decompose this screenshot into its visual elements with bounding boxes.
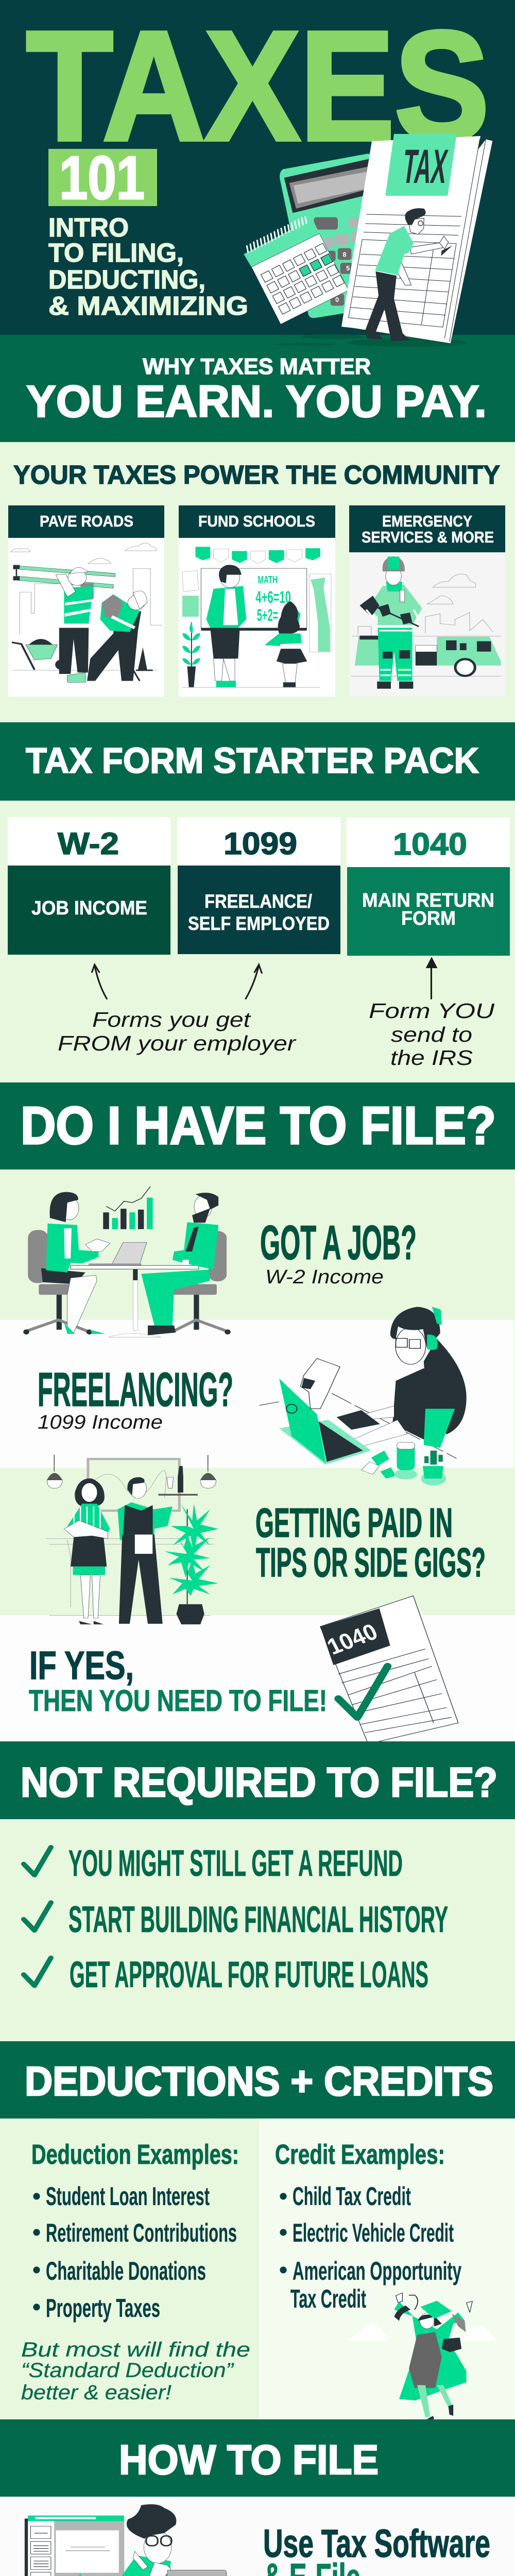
card: W-2: JOB INCOME: [31, 897, 147, 919]
note: form you send: Form YOU: [369, 999, 494, 1023]
icon: 1040 form with check: 1040: [323, 1619, 382, 1660]
icon: calculator: [280, 154, 372, 318]
banner: tax form starter pack: [0, 722, 515, 801]
text: getting paid in tips: [255, 1500, 486, 1585]
icon: 1040 form with check: [320, 1596, 458, 1741]
icon: calculator: 5: [346, 265, 350, 272]
icon: calculator: 8: [342, 251, 347, 258]
subtitle: intro to filing: DEDUCTING,: [48, 265, 205, 294]
illustration: freelancer at laptop: [260, 1307, 467, 1485]
note: standard deduction: But most will find the: [21, 2338, 250, 2361]
icon: tax form: [341, 134, 493, 344]
column: deductions: [21, 2139, 250, 2404]
column: deductions: Property Taxes: [46, 2294, 160, 2323]
list: not required benefits: [24, 1843, 448, 1995]
card: W-2: W-2: [58, 826, 119, 861]
card: 1099: SELF EMPLOYED: [188, 913, 330, 934]
illustration: road workers: [10, 543, 163, 682]
icon: calculator: 0: [335, 296, 339, 303]
illustration: teacher and student: [182, 547, 331, 687]
row: got a job: [23, 1187, 417, 1337]
banner: how to file: HOW TO FILE: [119, 2437, 379, 2483]
card: fund schools: [179, 505, 335, 697]
card: 1040: 1040: [393, 827, 467, 861]
column: deductions: Retirement Contributions: [46, 2218, 237, 2247]
card: fund schools: FUND SCHOOLS: [198, 512, 315, 530]
card: emergency services: EMERGENCY: [382, 512, 472, 530]
card: emergency services: SERVICES & MORE: [362, 528, 494, 546]
banner: do I have to file: [0, 1082, 515, 1170]
illustration: waiters and plant: [46, 1455, 218, 1624]
row: freelancing: [38, 1307, 467, 1485]
icon: calendar: [244, 217, 349, 324]
text: freelancing: FREELANCING?: [38, 1363, 233, 1416]
column: credits: Credit Examples:: [275, 2139, 445, 2170]
card: 1099: FREELANCE/: [204, 891, 312, 912]
note: forms from employer: [58, 1008, 297, 1055]
card: 1040: FORM: [401, 908, 456, 929]
subtitle: intro to filing: [48, 213, 248, 320]
figure: man writing: [365, 208, 452, 342]
banner: tax form starter pack: TAX FORM STARTER PACK: [26, 740, 479, 781]
illustration: office meeting: [23, 1187, 231, 1337]
row: if yes: [29, 1596, 458, 1741]
row: tax software: [0, 2497, 515, 2576]
text: if yes: IF YES,: [29, 1643, 134, 1688]
icon: tax form: TAX: [400, 139, 451, 193]
banner: how to file: [0, 2419, 515, 2497]
note: W-2 income: W-2 Income: [265, 1266, 384, 1288]
illustration: teacher and student: 5+2=: [257, 606, 278, 624]
panel: hero: [0, 0, 515, 442]
banner: deductions and credits: DEDUCTIONS + CREDITS: [25, 2058, 493, 2104]
card: emergency services: [349, 505, 505, 697]
note: standard deduction: [21, 2338, 250, 2404]
card: 1040: MAIN RETURN: [362, 890, 494, 911]
illustration: teacher and student: MATH: [258, 574, 278, 585]
card: W-2: [8, 817, 170, 955]
column: deductions: Deduction Examples:: [31, 2139, 239, 2170]
heading: you earn you pay: YOU EARN. YOU PAY.: [26, 377, 487, 427]
column: deductions: Charitable Donations: [46, 2257, 206, 2285]
column: deductions: Student Loan Interest: [46, 2182, 210, 2211]
note: form you send: [369, 999, 494, 1070]
note: form you send: send to: [391, 1023, 472, 1046]
panel: your taxes power the community: [8, 460, 505, 697]
card: 1099: [177, 817, 340, 954]
card: 1099: 1099: [224, 826, 297, 861]
card: pave roads: [8, 505, 164, 697]
panel: tax form cards: [8, 817, 510, 1070]
card: pave roads: PAVE ROADS: [40, 512, 133, 530]
note: 1099 income: 1099 Income: [38, 1412, 163, 1433]
card: 1040: [347, 818, 510, 956]
banner: deductions and credits: [0, 2041, 515, 2119]
text: then you need to file: THEN YOU NEED TO FILE!: [29, 1684, 327, 1718]
badge: 101: 101: [59, 144, 145, 212]
note: standard deduction: better & easier!: [21, 2381, 171, 2404]
illustration: firefighter and truck: [351, 556, 501, 689]
heading: why taxes matter: WHY TAXES MATTER: [143, 354, 371, 379]
banner: not required to file: [0, 1741, 515, 1819]
illustration: calculator, calendar, tax form and man: [244, 134, 493, 347]
note: forms from employer: Forms you get: [92, 1008, 251, 1031]
panel: credits background: [259, 2119, 515, 2419]
column: credits: [275, 2139, 496, 2424]
subtitle: intro to filing: & MAXIMIZING: [48, 291, 248, 320]
column: credits: Tax Credit: [290, 2284, 366, 2313]
note: form you send: the IRS: [390, 1046, 473, 1070]
illustration: teacher and student: 4+6=10: [255, 588, 291, 606]
note: standard deduction: “Standard Deduction”: [21, 2359, 234, 2382]
icons: check marks: [24, 1847, 51, 1986]
heading: community: YOUR TAXES POWER THE COMMUNITY: [13, 460, 500, 489]
note: forms from employer: FROM your employer: [58, 1031, 297, 1055]
illustration: person with laptop and software window: [25, 2504, 227, 2576]
subtitle: intro to filing: INTRO: [48, 213, 129, 242]
column: credits: Child Tax Credit: [293, 2182, 411, 2211]
illustration: graduate: [348, 2293, 496, 2424]
panel: bands: [0, 1320, 515, 1742]
arrows: form notes: [92, 958, 436, 999]
row: tips or side gigs: [46, 1455, 486, 1624]
subtitle: intro to filing: TO FILING,: [48, 238, 184, 267]
